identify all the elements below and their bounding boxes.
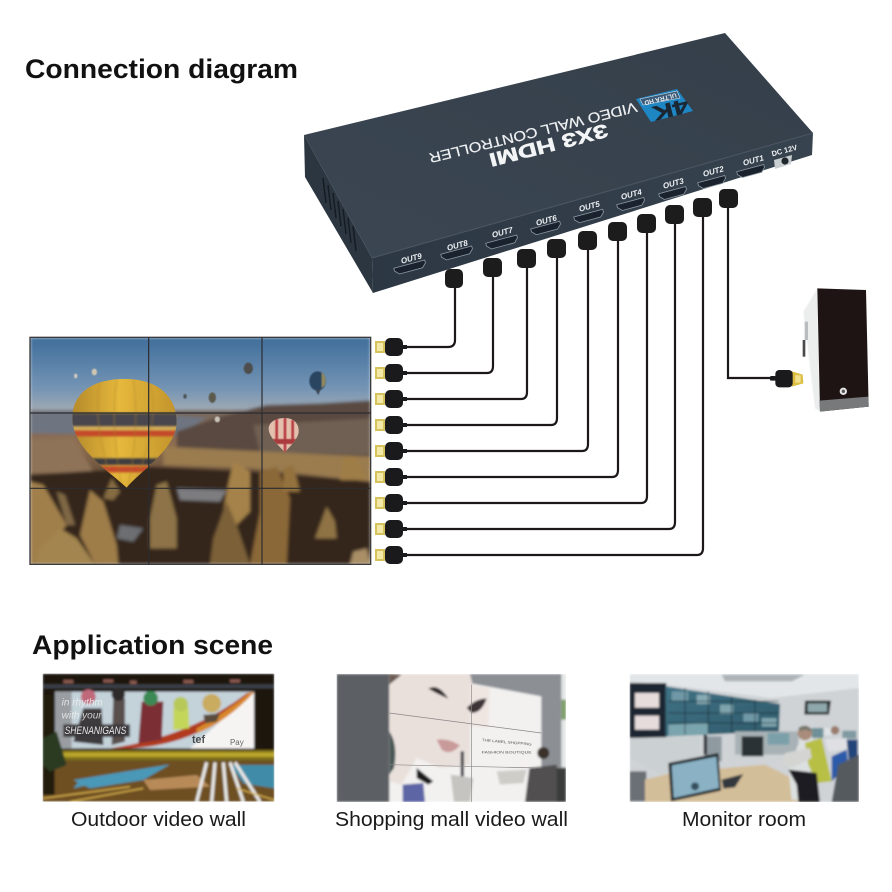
- caption: Monitor room: Monitor room: [682, 809, 806, 831]
- billboard text: in rhythm: [62, 698, 103, 709]
- video wall photo: hot air balloons: [30, 337, 371, 564]
- device top face: [304, 33, 813, 258]
- output port labels: OUT1: [742, 153, 765, 168]
- output port labels: OUT4: [620, 187, 643, 202]
- photo: outdoor video wall: with your: [62, 710, 102, 721]
- small striped balloon: [268, 418, 299, 452]
- DC power jack: [774, 155, 792, 169]
- wall bezel grid: [30, 337, 371, 564]
- output port labels: [400, 143, 798, 266]
- PC tower with HDMI plug: [770, 288, 869, 412]
- photo: outdoor video wall: Pay: [230, 738, 244, 747]
- PC power button: [840, 388, 847, 395]
- HDMI ports: [394, 164, 766, 275]
- cable plugs at controller ports: [445, 189, 738, 288]
- device left side with vents: [304, 135, 373, 293]
- output port labels: DC 12V: [771, 143, 798, 158]
- device name text: 3X3 HDMI: [487, 119, 610, 170]
- PC HDMI plug: [770, 370, 803, 387]
- caption: Shopping mall video wall: Shopping mall video wall: [335, 809, 568, 831]
- photo: outdoor video wall: tef: [192, 734, 205, 746]
- wall seams and printed text: FASHION BOUTIQUE: [482, 750, 532, 754]
- output port labels: OUT3: [662, 176, 685, 191]
- caption: Outdoor video wall: Outdoor video wall: [71, 809, 246, 831]
- photo: monitor room: [630, 674, 859, 802]
- wall seams and printed text: THE LABEL SHOPPING: [482, 738, 532, 747]
- photo: outdoor video wall: [43, 674, 274, 802]
- output port labels: OUT7: [491, 225, 514, 240]
- 4K ultra logo: [636, 89, 693, 124]
- output port labels: OUT9: [400, 251, 423, 266]
- wall seams and printed text: [389, 685, 541, 802]
- output port labels: OUT2: [702, 164, 725, 179]
- output port labels: OUT5: [578, 199, 601, 214]
- large yellow balloon: [70, 379, 180, 488]
- heading: Application scene: Application scene: [32, 630, 273, 660]
- 4K ultra logo: 4K: [650, 94, 691, 124]
- PC front panel: [817, 288, 869, 412]
- output port labels: OUT8: [446, 238, 469, 253]
- title: Connection diagram: Connection diagram: [25, 54, 298, 84]
- photo: outdoor video wall: SHENANIGANS: [65, 725, 126, 737]
- HDMI connectors at video wall: [375, 338, 407, 564]
- photo: shopping mall video wall: [337, 674, 566, 802]
- device front face: [372, 133, 813, 293]
- device subtitle text: VIDEO WALL CONTROLLER: [427, 99, 639, 166]
- 4K ultra logo: ULTRA HD: [643, 91, 677, 106]
- device: 3x3 HDMI video wall controller: [304, 33, 813, 293]
- distant balloons: [74, 363, 326, 422]
- output port labels: OUT6: [535, 213, 558, 228]
- PC side panel: [803, 288, 820, 412]
- HDMI cables from controller to wall and PC: [403, 205, 775, 555]
